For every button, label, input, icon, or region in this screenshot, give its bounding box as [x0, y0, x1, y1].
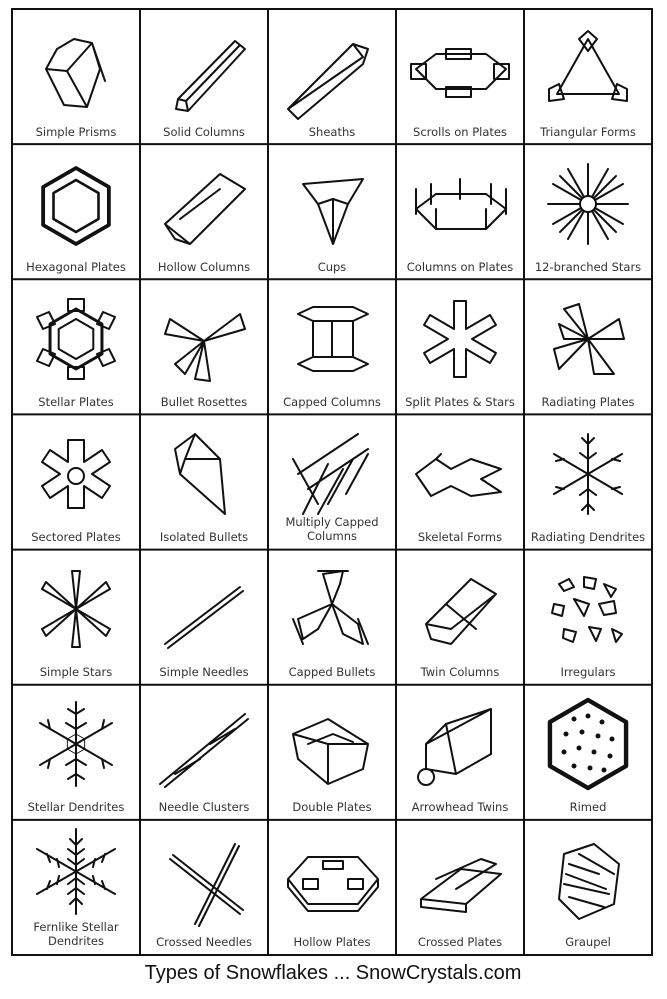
cell: Rimed [550, 700, 626, 814]
cell: Stellar Plates: Stellar Plates [38, 395, 114, 409]
cell: Needle Clusters: Needle Clusters [159, 800, 249, 814]
cell: Graupel: Graupel [565, 935, 611, 949]
cell: Arrowhead Twins: Arrowhead Twins [412, 800, 508, 814]
cell: Hollow Plates: Hollow Plates [294, 935, 370, 949]
cell: Capped Columns: Capped Columns [283, 395, 381, 409]
cell: Columns on Plates: Columns on Plates [407, 260, 513, 274]
cell: Radiating Plates [541, 304, 635, 409]
cell: Radiating Dendrites: Radiating Dendrites [531, 530, 645, 544]
cell: Hexagonal Plates [26, 168, 126, 274]
cell: Capped Bullets [289, 571, 375, 679]
cell: Graupel [559, 844, 619, 949]
cell: Fernlike Stellar Dendrites: Fernlike Stellar [33, 920, 119, 934]
cell: Hexagonal Plates: Hexagonal Plates [26, 260, 126, 274]
cell: Crossed Needles [156, 844, 252, 949]
cell: Stellar Dendrites: Stellar Dendrites [28, 800, 124, 814]
cell: Fernlike Stellar Dendrites [33, 829, 119, 948]
cell: Sheaths [288, 44, 368, 139]
cell: Irregulars [552, 577, 622, 679]
cell: Triangular Forms: Triangular Forms [539, 125, 636, 139]
cell: Multiply Capped Columns [285, 434, 379, 543]
cell: Radiating Dendrites [531, 434, 645, 544]
cell: Columns on Plates [407, 179, 513, 274]
cell: Arrowhead Twins [412, 709, 508, 814]
cell: Triangular Forms [539, 31, 636, 139]
cell: 12-branched Stars [535, 164, 641, 274]
cell: Split Plates & Stars: Split Plates & Stars [405, 395, 515, 409]
cell: Simple Stars: Simple Stars [40, 665, 112, 679]
cell: Bullet Rosettes: Bullet Rosettes [161, 395, 247, 409]
cell: Capped Bullets: Capped Bullets [289, 665, 375, 679]
cell: Simple Needles [159, 587, 249, 679]
cell: Scrolls on Plates: Scrolls on Plates [413, 125, 507, 139]
cell: Crossed Plates: Crossed Plates [418, 935, 502, 949]
cell: Multiply Capped Columns: Columns [307, 529, 357, 543]
cell: Isolated Bullets [160, 434, 248, 544]
cell: Cups: Cups [318, 260, 346, 274]
cell: Double Plates [292, 719, 372, 814]
cell: Scrolls on Plates [411, 49, 509, 139]
cell: Sectored Plates: Sectored Plates [31, 530, 121, 544]
cell: Twin Columns: Twin Columns [420, 665, 499, 679]
cell: Isolated Bullets: Isolated Bullets [160, 530, 248, 544]
cell: Double Plates: Double Plates [292, 800, 372, 814]
cell: Capped Columns [283, 307, 381, 409]
cell: Simple Prisms [36, 39, 116, 139]
cell: Twin Columns [420, 579, 499, 679]
title caption: Types of Snowflakes ... SnowCrystals.com [145, 962, 521, 984]
cell: Hollow Columns: Hollow Columns [158, 260, 250, 274]
cell: Multiply Capped Columns: Multiply Capped [285, 515, 379, 529]
cell: Hollow Columns [158, 174, 250, 274]
cell: Simple Stars [40, 571, 112, 679]
cell: Crossed Plates [418, 859, 502, 949]
cell: Solid Columns: Solid Columns [163, 125, 245, 139]
cell: Needle Clusters [159, 714, 249, 814]
cell: Simple Needles: Simple Needles [159, 665, 249, 679]
cell: Hollow Plates [288, 857, 378, 949]
cell: Skeletal Forms [416, 454, 502, 544]
cell: Sectored Plates [31, 440, 121, 544]
cell: Sheaths: Sheaths [309, 125, 355, 139]
cell: Irregulars: Irregulars [560, 665, 616, 679]
cell: Skeletal Forms: Skeletal Forms [418, 530, 502, 544]
cell: Solid Columns [163, 41, 245, 139]
cell: Stellar Plates [37, 299, 115, 409]
cell: 12-branched Stars: 12-branched Stars [535, 260, 641, 274]
cell: Simple Prisms: Simple Prisms [36, 125, 116, 139]
cell: Crossed Needles: Crossed Needles [156, 935, 252, 949]
cell: Bullet Rosettes [161, 314, 247, 409]
cell: Rimed: Rimed [570, 800, 606, 814]
cell: Cups [303, 179, 363, 274]
cell: Fernlike Stellar Dendrites: Dendrites [48, 934, 104, 948]
cell: Split Plates & Stars [405, 301, 515, 409]
cell: Radiating Plates: Radiating Plates [541, 395, 635, 409]
cell: Stellar Dendrites [28, 702, 124, 814]
